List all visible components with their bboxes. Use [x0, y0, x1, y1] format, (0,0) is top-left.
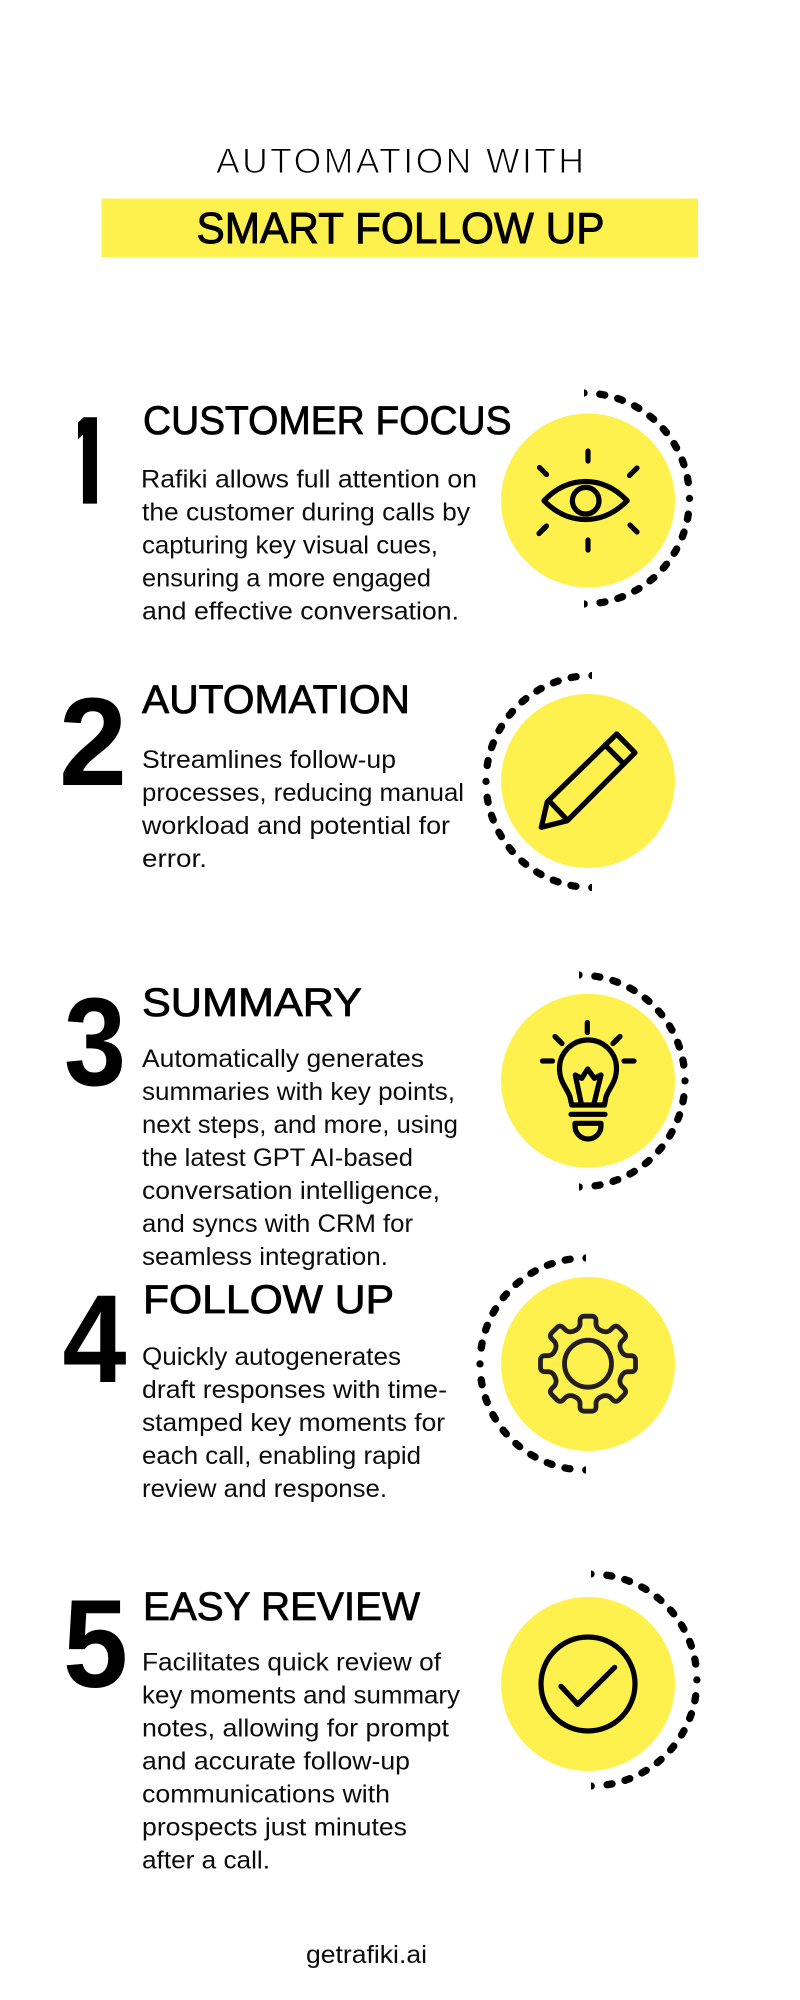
panel: step 1 customer focus [59, 384, 690, 626]
dashed arc [584, 393, 690, 604]
footer url: getrafiki.ai [306, 1941, 427, 1969]
body text: easy review: after a call. [142, 1846, 270, 1874]
panel: step 2 automation [59, 673, 675, 888]
body text: summary [142, 1045, 458, 1271]
dashed arc [591, 1574, 697, 1786]
body text: easy review: and accurate follow-up [142, 1748, 410, 1776]
number 2: 2 [59, 673, 127, 812]
body text: easy review: notes, allowing for prompt [142, 1714, 449, 1742]
body text: automation [141, 746, 464, 873]
heading: customer focus: CUSTOMER FOCUS [143, 399, 512, 443]
body text: follow up: review and response. [142, 1475, 387, 1503]
dashed arc [579, 975, 685, 1187]
body text: easy review: Facilitates quick review of [142, 1648, 441, 1676]
yellow circle [501, 1597, 675, 1771]
panel: step 3 summary [64, 973, 685, 1271]
body text: customer focus: ensuring a more engaged [142, 564, 431, 592]
number 1: 1 [59, 384, 116, 552]
icon: gear [540, 1316, 636, 1411]
icon: check mark in circle [541, 1637, 635, 1731]
body text: follow up: draft responses with time- [142, 1376, 447, 1404]
dashed arc [480, 1258, 586, 1470]
body text: automation: workload and potential for [141, 812, 450, 840]
title line: automation with: AUTOMATION WITH [216, 141, 584, 181]
heading: follow up: FOLLOW UP [143, 1278, 394, 1322]
body text: summary: conversation intelligence, [142, 1177, 440, 1205]
heading: automation: AUTOMATION [142, 678, 410, 722]
panel: step 5 easy review [63, 1574, 697, 1874]
body text: customer focus: capturing key visual cues, [142, 532, 438, 560]
icon: pencil [541, 734, 635, 827]
body text: follow up: Quickly autogenerates [142, 1343, 401, 1371]
body text: easy review: communications with [142, 1780, 390, 1808]
number 3: 3 [64, 973, 126, 1112]
body text: customer focus: and effective conversation. [142, 598, 459, 626]
icon: light bulb [542, 1022, 634, 1139]
dashed arc [486, 676, 592, 888]
body text: follow up: each call, enabling rapid [142, 1442, 421, 1470]
body text: automation: error. [142, 845, 207, 873]
body text: follow up [142, 1343, 447, 1503]
body text: summary: the latest GPT AI-based [142, 1144, 413, 1172]
body text: summary: next steps, and more, using [142, 1111, 458, 1139]
body text: customer focus [141, 466, 477, 626]
yellow circle [501, 694, 675, 868]
body text: follow up: stamped key moments for [142, 1409, 445, 1437]
yellow circle [501, 994, 675, 1168]
title block [102, 141, 698, 257]
body text: automation: processes, reducing manual [142, 779, 464, 807]
icon: eye [539, 451, 637, 550]
body text: customer focus: Rafiki allows full attention on [141, 466, 477, 494]
body text: summary: and syncs with CRM for [142, 1210, 413, 1238]
title line: smart follow up: SMART FOLLOW UP [196, 204, 604, 253]
number 4: 4 [62, 1270, 126, 1409]
body text: easy review [142, 1648, 461, 1874]
body text: customer focus: the customer during calls by [142, 498, 471, 526]
body text: summary: summaries with key points, [142, 1078, 455, 1106]
body text: automation: Streamlines follow-up [142, 746, 396, 774]
body text: easy review: prospects just minutes [142, 1814, 407, 1842]
body text: summary: seamless integration. [142, 1243, 388, 1271]
panel: step 4 follow up [62, 1258, 675, 1503]
body text: easy review: key moments and summary [142, 1682, 461, 1710]
number 5: 5 [63, 1575, 128, 1714]
heading: summary: SUMMARY [142, 981, 362, 1025]
yellow circle [501, 1277, 675, 1451]
yellow circle [501, 414, 675, 588]
heading: easy review: EASY REVIEW [143, 1585, 420, 1629]
body text: summary: Automatically generates [142, 1045, 424, 1073]
yellow title banner [102, 198, 698, 257]
